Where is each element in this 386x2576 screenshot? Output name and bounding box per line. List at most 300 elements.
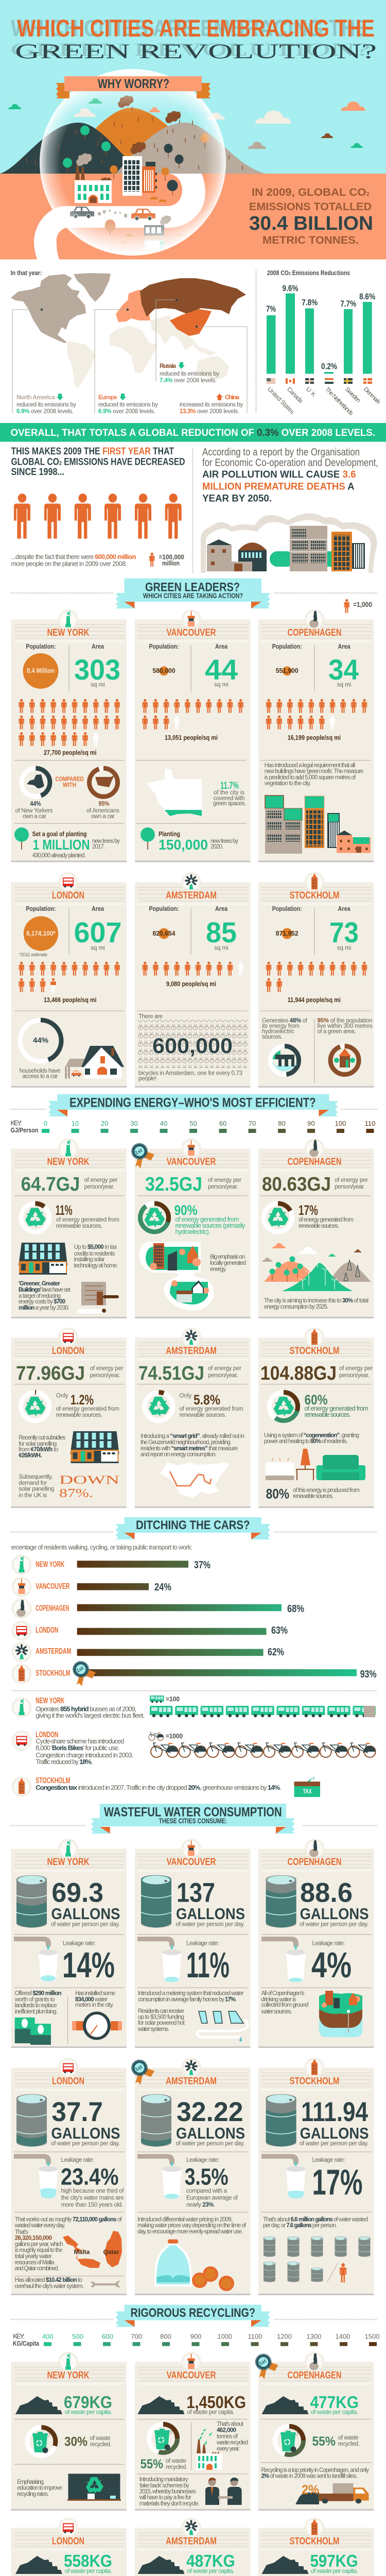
text: 80% renewable: renewable sources. [293,1494,334,1500]
ring: hydroelectric [268,1044,301,1077]
text: hydroelectric and green area: 95% of the population [317,1018,373,1024]
section banner: green leaders [10,579,377,608]
population and area: Area [92,905,104,912]
leakage rate: 11% [186,1945,230,1985]
key: KG per capita: 1200 [277,2333,292,2340]
population and area: 551,900 [276,667,299,674]
car ownership rings: own a car [23,814,46,820]
energy use figure: person/year. [208,1184,238,1190]
tree planting: Planting [159,831,180,838]
ring: car access: households have [20,1068,61,1074]
waste figure: of waste per capita. [187,2410,235,2416]
chart: 2008 CO2 emissions reductions: The Netherlands [324,385,355,417]
text: smart grid [141,1433,244,1458]
illustration: house [65,1046,124,1079]
text: take back schemes: materials they don't recycle. [139,2501,200,2507]
text: wasted water: wasted water every day. [14,2223,65,2229]
illustration: office buildings [122,156,157,196]
leak illustration [137,2154,181,2199]
leakage rate [312,2157,362,2202]
key: KG per capita [13,2332,379,2347]
text: wasted water [14,2216,122,2272]
panel: Copenhagen green leaders [258,609,374,862]
map callout: China [180,326,247,415]
map callout: Europe: Europe [98,394,117,401]
text: 30% target [264,1298,369,1310]
population and area: Area [215,642,228,650]
text: renewable share [174,1202,245,1235]
ring: recycled share [147,2422,180,2455]
key: KG per capita: KEY: [13,2332,25,2340]
section banner: expending energy [10,1094,377,1116]
text: greener buildings: million a year by 2030. [19,1305,69,1311]
population and area: 303 [74,653,120,686]
New York hybrid buses [11,1697,145,1719]
icon: first place rosette [132,2061,154,2085]
leak illustration [261,2154,306,2198]
population and area [272,905,359,955]
text: greener buildings: a target of reducing [19,1293,61,1299]
text: cogeneration: Using a system of “cogeneration”, granting [264,1433,359,1439]
density label: 27,700 people/sq mi [44,749,97,756]
map callout: North America: North America [16,394,55,401]
illustration: dump truck: 2% [302,2483,319,2497]
text: there are: There are [138,1014,163,1020]
chart: 2008 CO2 emissions reductions: 7% [266,304,276,314]
population and area: 85 [206,916,237,948]
bar chart: car-free commuting: COPENHAGEN [36,1604,69,1613]
text: take back schemes: 'take back' schemes by [139,2483,189,2489]
panel: London water [11,2058,127,2295]
population and area: Area [338,642,350,650]
text: subsidies: for solar panelling [19,1441,57,1447]
population and area: 607 [74,916,121,948]
London cycling: LONDON [36,1731,58,1739]
section banner: green leaders: GREEN LEADERS? [145,580,240,595]
text: wasted water: That works out as roughly 72,110,000 gallons of [15,2216,122,2223]
barrel [266,1875,296,1928]
energy use figure: 32.5GJ [145,1174,202,1195]
number: 600,000: 600,000 [152,1033,233,1058]
title line 2: GREEN REVOLUTION? [15,40,377,63]
waste figure: 1,450KG [186,2393,246,2412]
header scene: sky [0,0,386,174]
text: tax credits: technology at home. [74,1263,118,1269]
text: renewable share: 90% [174,1202,198,1218]
energy use figure [145,1174,241,1195]
chart: 2008 CO2 emissions reductions: UK [305,385,318,398]
panel: London energy [11,1328,127,1508]
heading: VANCOUVER [167,1156,216,1167]
key: KG per capita: 400 [42,2333,54,2340]
consumption figure: 32.22 [177,2097,243,2127]
pictogram: density [142,699,243,730]
text: renewable share: renewable sources. [180,1412,226,1418]
waste figure [261,2551,358,2574]
tree planting: 2020. [210,844,223,850]
waste figure: 597KG [310,2551,358,2570]
text: 80% renewable: 80% [266,1486,289,1502]
illustration: local generation [139,1242,214,1311]
consumption figure: of water per person per day. [51,2141,120,2147]
waste figure [138,2393,246,2416]
legend: person equals 1,000: =1,000 [353,601,372,608]
text: groundwater: drinking water is [261,1997,296,2003]
text: OECD air pollution: According to a report by the Organisation [202,447,360,458]
text: renewable share: of energy generated from [305,1405,369,1412]
text: first year emissions decreased: GLOBAL CO2 EMISSIONS HAVE DECREASED [11,456,185,468]
text: green space: of the city is [214,790,244,796]
text: green roofs: is predicted to add 5,000 square metres of [265,775,356,781]
map: Malta and Qatar: Malta [74,2248,90,2256]
heading: NEW YORK [47,2370,90,2381]
text: groundwater [260,1991,309,2015]
text: landfill: 2% of waste in 2009 was sent to landfill sites. [261,2473,357,2480]
leak illustration [14,2154,58,2198]
population and area: Area [338,905,350,912]
population and area: 44 [205,653,238,686]
illustration: ground [0,174,386,260]
car ownership rings [15,766,120,820]
population and area: Population: [149,905,179,912]
waste figure: 679KG [64,2393,112,2412]
divider dotted [255,270,257,413]
icon: tax box [294,1777,320,1797]
Stockholm congestion tax [11,1776,282,1797]
illustration: green roof buildings [265,795,371,854]
icon: first place rosette: 1st [134,2064,144,2073]
consumption figure: GALLONS [300,2124,369,2142]
leakage rate: 14% [62,1945,115,1985]
map callout: Russia [156,299,219,384]
panel: Vancouver energy [132,1139,250,1318]
key: GJ per person: 10 [72,1120,79,1127]
key: KG per capita: 1400 [336,2333,350,2340]
population and area: *2011 estimate [19,952,47,957]
text: green roofs [265,762,363,787]
tree planting: new trees by [210,838,238,844]
heading: VANCOUVER [167,1856,216,1868]
population and area [19,905,121,957]
illustration: factory with leaves [197,2428,222,2470]
text: wasted water: That's [15,2229,28,2235]
bar chart: car-free commuting: AMSTERDAM [36,1647,71,1656]
text: recycled share [141,2457,187,2471]
text: allocated funds: overhaul the city's water system. [15,2283,84,2290]
pictogram: bikes: =1000 [166,1732,183,1740]
leakage rate: more than 150 years old. [61,2202,123,2208]
chart: 2008 CO2 emissions reductions: 2008 CO2 Emissions Reductions [267,269,350,277]
energy use figure: of energy per [335,1177,368,1183]
band: global reduction: OVERALL, THAT TOTALS A GLOBAL REDUCTION OF 0.3% OVER 2008 LEVELS. [11,427,375,438]
consumption figure: of water per person per day. [300,1922,369,1928]
bar chart: car-free commuting: STOCKHOLM [36,1669,70,1678]
text: 30% target: The city is aiming to increase this to 30% of total [264,1298,369,1304]
text: landfill [261,2467,369,2480]
illustration: winding road [34,174,205,260]
heading: NEW YORK [47,627,90,638]
text: wasted water: total yearly water [15,2253,52,2260]
panel: Amsterdam water [132,2058,250,2295]
energy use figure: 64.7GJ [21,1174,80,1195]
text: take back schemes: Introducing mandatory [139,2477,188,2483]
bar chart: car-free commuting: 62% [268,1647,284,1658]
key: GJ per person: 110 [365,1120,375,1127]
bar chart: car-free commuting: 63% [271,1625,288,1636]
text: education [17,2479,62,2497]
heading: AMSTERDAM [166,1345,217,1357]
text: wasted water: is roughly equal to the [15,2247,63,2253]
London cycling [11,1731,133,1766]
panel: New York recycling [11,2352,127,2511]
barrel [141,1875,171,1928]
bar chart: car-free commuting: 24% [154,1582,171,1593]
text: tax credits: installing solar [74,1257,105,1263]
panel: New York energy [11,1139,127,1318]
leakage rate: Leakage rate: [61,2157,94,2163]
leakage rate [61,2157,124,2208]
ring: renewable share [261,1201,294,1234]
heading: LONDON [52,890,84,901]
ring: renewable share [138,1201,171,1234]
icon: solar house [19,1243,67,1275]
legend: person equals 1,000 [344,599,372,613]
text: renewable share: of energy generated from [56,1217,119,1223]
text: hydroelectric and green area: Generates 48% of [262,1018,308,1024]
ring: car access: access to a car [23,1074,58,1080]
text: OECD air pollution: AIR POLLUTION WILL CAUSE 3.6 [202,469,356,480]
heading: AMSTERDAM [166,2536,217,2547]
waste figure: of waste per capita. [311,2567,358,2574]
leakage rate: compared with a [186,2188,227,2194]
leakage rate: 23.4% [61,2164,118,2190]
waste figure [15,2551,112,2574]
key: KG per capita: KG/Capita [13,2340,40,2347]
text: green roofs: new buildings have 'green roofs'. The measure [265,769,363,775]
energy use figure: of energy per [208,1365,241,1371]
key: GJ per person: 50 [189,1120,197,1127]
section banner: wasteful water consumption: THESE CITIES CONSUME: [159,1817,227,1825]
heading: COPENHAGEN [287,1156,342,1167]
map callout: Russia: Russia [160,362,176,369]
illustration: glass bubble [40,69,226,256]
text: renewable share: renewable sources. [56,1223,102,1229]
leakage rate: European average of [186,2195,238,2201]
car ownership rings: COMPARED [56,775,84,783]
consumption figure [176,2097,245,2147]
text: renewable share: of energy generated from [56,1406,119,1412]
text: recycled share: recycled. [90,2442,112,2448]
chart: 2008 CO2 emissions reductions: Sweden [344,385,362,404]
illustration: wind turbines and hills [262,1243,371,1291]
leakage rate: Leakage rate: [63,1941,96,1947]
waste figure: of waste per capita. [187,2567,235,2574]
consumption figure: 137 [177,1878,215,1908]
car ownership rings: of New Yorkers [15,808,53,814]
text: tonnes recycled: 462,000 [217,2428,236,2434]
waste figure [15,2393,112,2416]
text: grants and meters: landlords to replace [15,2003,57,2009]
consumption figure: 69.3 [51,1878,103,1908]
text: tonnes recycled: That's about [217,2421,244,2428]
illustration: mountains [0,107,266,174]
heading: STOCKHOLM [289,1345,340,1357]
bar chart: car-free commuting: NEW YORK [36,1561,65,1569]
map: smart grid route [160,1462,229,1498]
illustration: radiator, lamp and sofa [266,1449,365,1480]
energy use figure: of energy per [208,1177,241,1183]
text: smart grid: Introducing a “smart grid”, already rolled out in [141,1433,244,1439]
heading: NEW YORK [47,1856,90,1868]
car ownership rings: own a car [91,814,115,820]
pictogram: density [19,699,120,746]
map callout: Europe: 6.9% over 2008 levels. [98,409,155,415]
energy use figure: person/year. [335,1184,365,1190]
population and area [149,642,238,692]
icon: first place rosette: 1st [76,1665,85,1674]
text: grants and meters [14,1991,115,2044]
text: grants and meters: Offered $290 million [15,1991,62,1997]
consumption figure: GALLONS [51,1905,120,1923]
key: KG per capita: 900 [190,2333,202,2340]
leakage rate: Leakage rate: [312,1941,345,1947]
text: renewable share [305,1392,369,1418]
heading: VANCOUVER [167,627,216,638]
band: global reduction [0,423,386,442]
text: tax credits [74,1244,118,1269]
leakage rate: the city's water mains are [61,2195,124,2201]
chart: 2008 CO2 emissions reductions [266,269,382,417]
text: green space: covered with [213,795,245,802]
icon: first place rosette [132,1144,154,1168]
panel: Amsterdam green leaders [135,872,250,1088]
text: wasted water: gallons per year, which [15,2241,63,2247]
text: smart grid: and report on energy consumption. [141,1452,217,1458]
consumption figure [176,1878,245,1928]
tree planting: 150,000 [159,837,208,853]
chart: 2008 CO2 emissions reductions: 9.6% [282,283,299,293]
icon: water meter [72,2011,122,2040]
key: KG per capita: 1300 [307,2333,321,2340]
callout: solar demand down 87%: DOWN [59,1473,120,1486]
text: recycled share: 55% [312,2434,336,2449]
heading: AMSTERDAM [166,2075,217,2087]
energy use figure: 74.51GJ [138,1363,204,1384]
panel: Vancouver green leaders [135,609,250,862]
panel: Stockholm recycling [258,2518,374,2576]
key: KG per capita: 800 [160,2333,171,2340]
heading: LONDON [52,2536,84,2547]
key: KG per capita: 500 [72,2333,83,2340]
New York hybrid buses: NEW YORK [36,1697,65,1705]
text: wasted water: per day, or 7.6 gallons per person. [263,2223,337,2229]
text: OECD air pollution [202,447,378,504]
population and area [149,905,237,955]
text: green roofs: vegetation to the city. [265,781,311,787]
text: renewable share [56,1392,119,1418]
heading: STOCKHOLM [289,2536,340,2547]
population and area: Population: [26,905,56,912]
chart: 2008 CO2 emissions reductions: Canada [286,385,305,404]
text: renewable share: 11% [56,1202,73,1218]
tree planting: 1 MILLION [33,837,90,853]
text: smart grid: residents with “smart metres” that measure [141,1446,238,1452]
panel: Stockholm energy [258,1328,374,1508]
text: tonnes recycled [216,2421,248,2452]
London cycling: Congestion charge introduced in 2003. [36,1751,133,1759]
text: first year emissions decreased: SINCE 1998... [11,467,64,478]
callout: global emissions total [249,187,373,246]
text: 80% renewable: of this energy is produced from [293,1487,360,1494]
Stockholm congestion tax: STOCKHOLM [36,1776,70,1785]
London cycling: Cycle-share scheme has introduced [36,1737,124,1745]
text: solar hot water funding: up to $3,500 funding [138,2014,184,2021]
text: differential pricing: Introduced differential water pricing in 2009, [137,2216,233,2223]
energy use figure: of energy per [90,1365,124,1371]
tree planting: Set a goal of planting [32,831,87,838]
text: locally generated energy [210,1254,246,1273]
heading: LONDON [52,2075,84,2087]
consumption figure: 88.6 [300,1878,353,1908]
text: grants and meters: Has installed some [75,1991,115,1997]
text: locally generated energy: energy. [210,1266,226,1273]
icon: wrench [91,2281,120,2287]
heading: LONDON [52,1345,84,1357]
map: Malta and Qatar [63,2231,122,2268]
consumption figure: of water per person per day. [176,1922,245,1928]
text: solar hot water funding [137,2008,185,2032]
population and area: 73 [329,916,359,948]
tree planting [141,827,238,853]
panel: London recycling [11,2518,127,2576]
density label: 16,199 people/sq mi [288,734,341,741]
text: first year emissions decreased: THIS MAKES 2009 THE FIRST YEAR THAT [11,446,174,457]
barrel [16,2094,47,2146]
population and area: sq mi [214,945,229,951]
density label: 13,051 people/sq mi [165,734,218,741]
barrel [266,2094,296,2146]
text: greener buildings: Buildings' laws have set [19,1287,71,1293]
text: metering: Introduced a metering system that reduced water [138,1991,244,1997]
text: bicycles [138,1070,242,1082]
section banner: expending energy: EXPENDING ENERGY–WHO'S MOST EFFICIENT? [69,1095,316,1110]
tree planting: 430,000 already planted. [32,853,86,859]
text: renewable share: 60% [305,1392,328,1408]
map callout: China: China [225,394,239,401]
panel: Copenhagen energy [258,1139,374,1318]
map callout: North America: 6.9% over 2008 levels. [16,409,74,415]
ring: renewable share [142,1390,175,1423]
text: renewable share [299,1202,354,1229]
consumption figure: GALLONS [51,2124,120,2142]
ring: car access: 44% [33,1036,48,1045]
key: KG per capita: 600 [102,2333,113,2340]
text: hydroelectric and green area: sources. [262,1034,283,1040]
bar chart: car-free commuting: 68% [287,1603,304,1615]
panel: Copenhagen water [258,1839,374,2048]
waste figure: 477KG [310,2393,359,2412]
callout: global emissions total: EMISSIONS TOTALLED [249,201,372,213]
population and area: Population: [149,642,179,650]
heading: COPENHAGEN [287,2370,342,2381]
consumption figure [51,2097,120,2147]
key: GJ per person: 70 [249,1120,256,1127]
icon: first place rosette: 1st [134,1147,144,1156]
map callout: China: increased its emissions by [180,402,243,408]
leakage rate: 17% [312,2162,362,2202]
text: tonnes recycled: every year. [217,2446,240,2452]
text: 30% target: energy consumption by 2025. [264,1304,328,1310]
